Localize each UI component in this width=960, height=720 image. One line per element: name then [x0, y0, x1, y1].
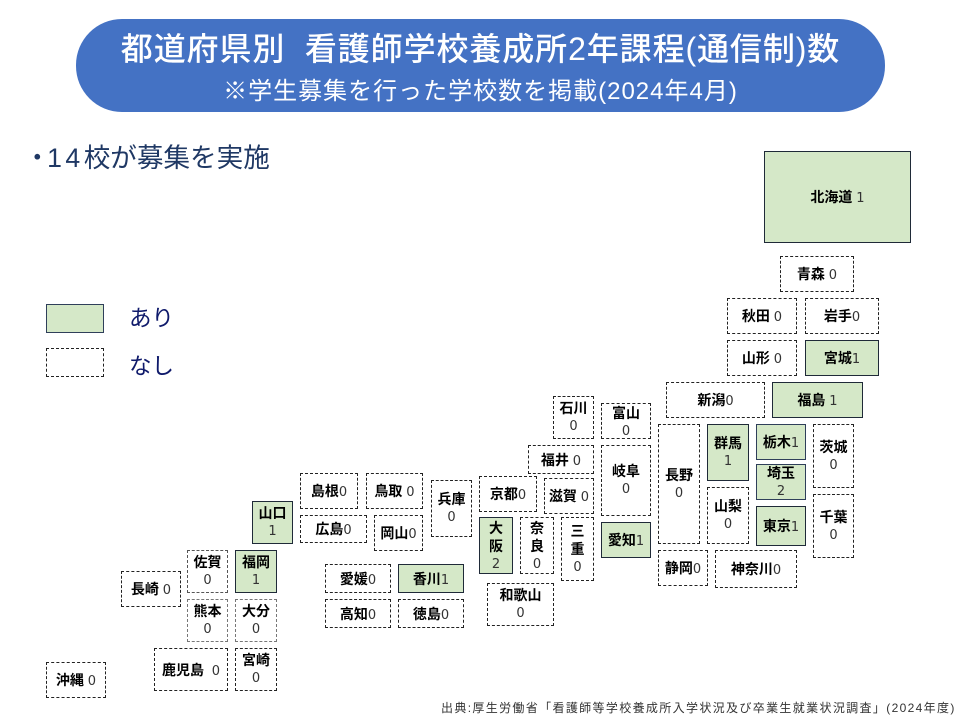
群馬: 群馬	[714, 435, 742, 451]
legend label: yes: あり	[129, 306, 174, 331]
神奈川: 神奈川0	[731, 561, 781, 578]
石川: 0	[569, 419, 578, 434]
岐阜: 岐阜	[612, 463, 640, 479]
legend: no	[46, 348, 104, 377]
大分	[235, 599, 277, 642]
徳島: 徳島0	[413, 606, 449, 622]
島根	[300, 473, 358, 509]
埼玉	[756, 464, 806, 500]
宮城	[805, 340, 879, 376]
和歌山	[487, 583, 554, 626]
鹿児島	[154, 648, 228, 691]
石川: 石川	[560, 400, 588, 416]
秋田	[727, 298, 797, 334]
岡山	[374, 515, 423, 551]
福岡: 1	[252, 573, 260, 588]
京都	[479, 476, 537, 512]
subtitle: ※学生募集を行った学校数を掲載(2024年4月)	[223, 78, 738, 105]
静岡	[658, 550, 708, 586]
legend label: no: なし	[129, 354, 174, 379]
奈良: 0	[533, 556, 541, 572]
北海道	[764, 151, 911, 243]
大阪: 阪	[489, 538, 503, 554]
東京	[756, 506, 806, 546]
熊本: 0	[203, 622, 212, 637]
栃木	[756, 424, 806, 460]
岐阜	[601, 445, 651, 516]
兵庫	[431, 480, 472, 537]
山口	[252, 501, 293, 544]
千葉: 千葉	[820, 508, 848, 524]
長野: 0	[675, 486, 683, 500]
熊本: 熊本	[194, 603, 222, 619]
source note: 出典:厚生労働省「看護師等学校養成所入学状況及び卒業生就業状況調査」(2024年度)	[441, 701, 956, 715]
岐阜: 0	[622, 482, 630, 497]
高知: 高知0	[340, 606, 376, 622]
岩手	[805, 298, 879, 334]
長崎	[121, 571, 181, 607]
佐賀: 佐賀	[194, 554, 222, 570]
福島: 福島 1	[797, 392, 838, 409]
静岡: 静岡0	[665, 560, 701, 577]
長崎: 長崎 0	[131, 581, 171, 598]
富山: 0	[622, 424, 630, 438]
千葉	[813, 494, 854, 558]
熊本	[187, 599, 228, 642]
長野: 長野	[665, 466, 693, 482]
兵庫: 兵庫	[438, 491, 466, 507]
島根: 島根0	[311, 483, 347, 500]
宮崎: 宮崎	[242, 652, 270, 668]
山形: 山形 0	[742, 350, 782, 367]
佐賀	[187, 550, 228, 593]
奈良: 奈	[530, 520, 544, 536]
北海道: 北海道 1	[810, 189, 865, 206]
茨城: 茨城	[820, 438, 848, 454]
愛知: 愛知1	[608, 532, 644, 549]
神奈川	[715, 550, 797, 588]
legend: yes	[46, 304, 104, 333]
三重: 三	[570, 522, 584, 538]
長野	[658, 424, 700, 544]
埼玉: 2	[777, 484, 785, 498]
大分: 大分	[242, 603, 270, 619]
栃木: 栃木1	[763, 434, 799, 451]
三重: 重	[570, 540, 584, 556]
和歌山: 和歌山	[500, 587, 542, 603]
大阪: 大	[489, 520, 503, 536]
新潟: 新潟0	[697, 392, 734, 409]
群馬: 1	[724, 454, 732, 469]
main title: 都道府県別 看護師学校養成所2年課程(通信制)数	[121, 31, 840, 67]
滋賀: 滋賀 0	[549, 488, 589, 505]
東京: 東京1	[763, 518, 799, 535]
宮崎: 0	[252, 671, 260, 686]
京都: 京都0	[490, 486, 526, 503]
奈良: 良	[530, 538, 544, 554]
鹿児島: 鹿児島 0	[162, 662, 220, 678]
福岡	[235, 550, 277, 593]
福井	[528, 445, 594, 474]
富山	[601, 403, 651, 439]
山形	[727, 340, 797, 376]
愛知	[601, 522, 651, 558]
石川	[553, 396, 594, 439]
和歌山: 0	[516, 606, 525, 621]
千葉: 0	[829, 528, 838, 542]
福岡: 福岡	[242, 554, 270, 570]
茨城: 0	[829, 458, 838, 472]
大阪: 2	[492, 556, 500, 572]
愛媛: 愛媛0	[340, 570, 376, 588]
青森	[780, 256, 854, 292]
大分: 0	[252, 622, 260, 637]
奈良	[520, 517, 554, 574]
山梨: 0	[724, 517, 732, 532]
兵庫: 0	[447, 510, 456, 525]
香川	[398, 564, 464, 593]
宮崎	[235, 648, 277, 691]
広島: 広島0	[315, 521, 352, 538]
summary text: ・14校が募集を実施	[24, 143, 270, 173]
大阪	[479, 517, 513, 574]
秋田: 秋田 0	[742, 308, 782, 325]
新潟	[666, 382, 765, 418]
山口: 山口	[258, 505, 286, 521]
山梨: 山梨	[714, 498, 742, 514]
title banner	[76, 19, 885, 112]
群馬	[707, 424, 749, 481]
沖縄	[46, 662, 106, 698]
岡山: 岡山0	[380, 525, 417, 542]
三重	[561, 517, 594, 581]
滋賀	[544, 478, 594, 514]
鳥取	[366, 473, 423, 509]
埼玉: 埼玉	[767, 464, 795, 480]
青森: 青森 0	[797, 266, 837, 283]
高知	[325, 599, 391, 628]
山梨	[707, 487, 749, 544]
茨城	[813, 424, 854, 488]
山口: 1	[268, 524, 277, 539]
佐賀: 0	[203, 573, 212, 588]
鳥取: 鳥取 0	[374, 483, 415, 500]
岩手: 岩手0	[824, 308, 860, 325]
富山: 富山	[612, 404, 640, 420]
三重: 0	[573, 560, 582, 574]
福島	[772, 382, 863, 418]
沖縄: 沖縄 0	[56, 672, 96, 689]
愛媛	[325, 564, 391, 593]
徳島	[398, 599, 464, 628]
香川: 香川1	[413, 570, 449, 588]
宮城: 宮城1	[824, 350, 860, 367]
福井: 福井 0	[541, 452, 581, 468]
広島	[300, 515, 367, 543]
